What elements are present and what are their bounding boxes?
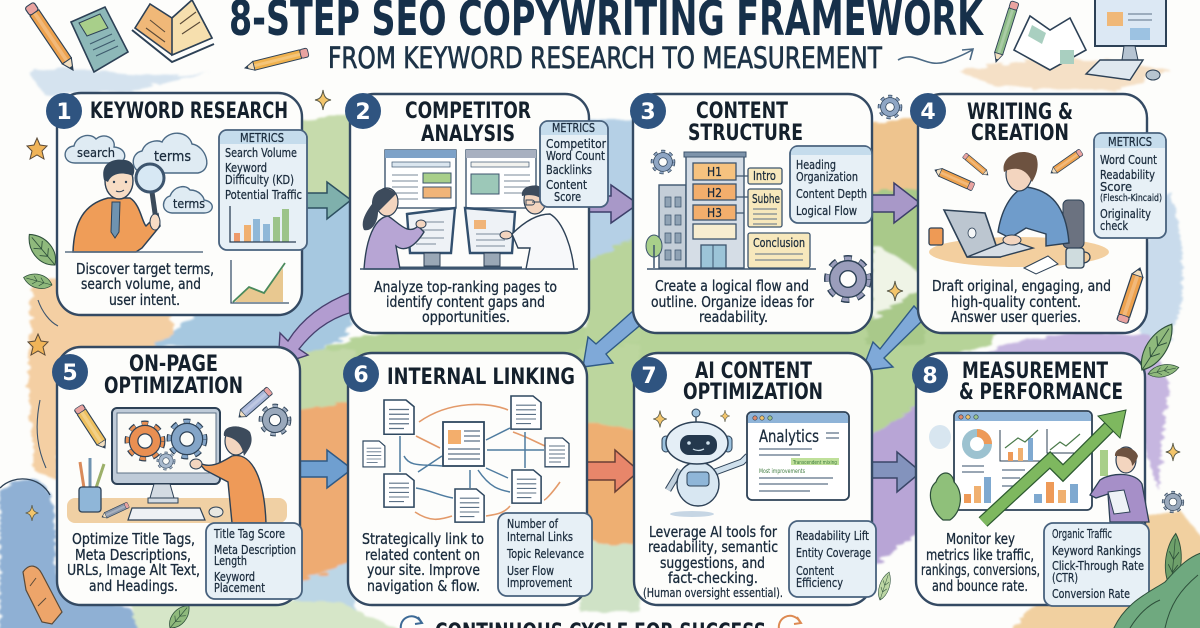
body text: suggestions, and	[660, 554, 765, 572]
heading: writing and creation: CREATION	[971, 121, 1069, 146]
body text	[362, 530, 484, 595]
illustration: browser pages and people at monitors	[360, 150, 578, 269]
arrow: step 3 to step 4	[868, 183, 920, 223]
metrics box: Backlinks	[546, 162, 592, 177]
metrics box: Word Count	[546, 148, 605, 163]
badge 3	[630, 93, 666, 129]
arrow: step 4 to step 7	[862, 306, 925, 371]
metrics box: Efficiency	[796, 575, 843, 590]
body text: readability, semantic	[648, 538, 778, 556]
illustration: building with heading levels: H2	[707, 185, 722, 200]
heading: keyword research: KEYWORD RESEARCH	[90, 99, 288, 124]
illustration: robot	[653, 409, 748, 517]
body text: Create a logical flow and	[655, 277, 809, 295]
body text: readability.	[699, 308, 768, 326]
heading: on-page optimization: OPTIMIZATION	[104, 374, 243, 399]
body text: rankings, conversions,	[921, 561, 1040, 579]
metrics box	[219, 130, 307, 250]
body text	[932, 277, 1111, 326]
metrics box: METRICS	[1108, 134, 1152, 149]
illustration: monitor with gears and person	[67, 387, 288, 523]
badge 7	[631, 357, 667, 393]
body text: Meta Descriptions,	[75, 546, 191, 564]
body text: related content on	[365, 546, 480, 564]
metrics box	[498, 513, 592, 596]
outline cards: Subhe	[752, 191, 780, 206]
header decoration: pencils and books left	[25, 0, 309, 73]
metrics box: User Flow	[507, 563, 554, 578]
body text: URLs, Image Alt Text,	[67, 561, 200, 579]
badge 1: 1	[56, 100, 72, 125]
heading: ai content optimization: AI CONTENT	[695, 359, 812, 384]
metrics box	[1044, 523, 1149, 606]
arrow: step 3 to step 6	[583, 310, 644, 367]
metrics box: Content	[546, 177, 587, 192]
arrow: step 2 to step 3	[585, 185, 638, 223]
body text: Monitor key	[946, 530, 1015, 548]
body text: Optimize Title Tags,	[72, 530, 195, 548]
metrics box: Difficulty (KD)	[225, 172, 294, 187]
arrow: step 7 to step 8	[866, 452, 921, 492]
bar chart	[230, 206, 296, 242]
heading: competitor analysis: COMPETITOR	[405, 99, 531, 124]
heading: on-page optimization: ON-PAGE	[129, 352, 218, 377]
metrics box: (Flesch-Kincaid)	[1100, 193, 1162, 204]
metrics box	[789, 521, 876, 597]
body text: outline. Organize ideas for	[651, 293, 815, 311]
panel: step 5 on-page optimization	[52, 347, 302, 605]
illustration: building with heading levels: H1	[707, 164, 722, 179]
body text: (Human oversight essential).	[643, 585, 783, 600]
body text: navigation & flow.	[367, 577, 480, 595]
metrics box	[540, 120, 608, 207]
illustration: building with heading levels	[646, 152, 816, 269]
body text: user intent.	[109, 291, 180, 309]
badge 5	[52, 354, 88, 390]
badge 4: 4	[920, 100, 936, 125]
metrics box: Content Depth	[796, 186, 867, 201]
metrics box: Competitor	[546, 136, 607, 151]
metrics box: Search Volume	[225, 145, 297, 160]
badge 6: 6	[353, 363, 369, 388]
metrics box: Title Tag Score	[213, 526, 285, 541]
analytics window	[747, 412, 849, 500]
metrics box: Readability Lift	[796, 528, 869, 543]
metrics box: Readability	[1100, 167, 1155, 182]
metrics box: Conversion Rate	[1052, 586, 1130, 601]
metrics box: Word Count	[1100, 152, 1157, 167]
metrics box: Score	[1100, 179, 1132, 194]
metrics box: Keyword	[225, 160, 267, 175]
heading: measurement and performance	[959, 359, 1123, 405]
metrics box: METRICS	[552, 120, 595, 135]
badge 8	[912, 357, 948, 393]
body text	[67, 530, 200, 595]
body text	[921, 530, 1040, 595]
metrics box: Organic Traffic	[1052, 526, 1112, 541]
body text: Discover target terms,	[76, 260, 214, 278]
metrics box: Meta Description	[214, 542, 296, 557]
illustration: dashboard with growth arrow and analyst	[929, 410, 1149, 522]
heading: ai content optimization	[683, 359, 823, 405]
heading: writing and creation: WRITING &	[967, 100, 1073, 125]
icon: small gear	[653, 152, 673, 172]
panel: step 4 writing and creation	[910, 93, 1166, 333]
body text: Answer user queries.	[951, 308, 1081, 326]
metrics box: Keyword Rankings	[1052, 543, 1141, 558]
metrics box: (CTR)	[1052, 570, 1078, 585]
link diagram	[363, 396, 569, 522]
panel: step 2 competitor analysis	[345, 93, 608, 333]
metrics box: Logical Flow	[796, 203, 857, 218]
illustration: clouds and person with magnifier: terms	[154, 149, 191, 165]
metrics box: Improvement	[507, 575, 572, 590]
metrics box: Number of	[507, 516, 558, 531]
metrics box	[790, 146, 872, 223]
icon: blue cycle arrow	[401, 616, 422, 628]
heading: ai content optimization: OPTIMIZATION	[683, 380, 823, 405]
heading: writing and creation	[967, 100, 1073, 146]
outline cards: Conclusion	[753, 235, 805, 250]
arrow: step 2 to step 5	[278, 292, 352, 365]
decorative stars, leaves, blue blob on left	[0, 90, 903, 628]
body text	[374, 278, 557, 326]
body text: metrics like traffic,	[926, 546, 1034, 564]
metrics box: check	[1100, 218, 1129, 233]
metrics box: Score	[554, 189, 581, 204]
analytics window: Analytics	[759, 427, 819, 447]
arrow: step 1 to step 2	[306, 182, 351, 219]
metrics box: Click-Through Rate	[1052, 558, 1144, 573]
panel: step 8 measurement and performance	[912, 353, 1149, 606]
header decoration: computer, book, pencil right	[898, 0, 1166, 80]
body text	[76, 260, 214, 309]
arrow: step 5 to step 6	[295, 450, 352, 488]
body text	[643, 523, 783, 600]
icon: large gear	[829, 260, 867, 298]
body text: identify content gaps and	[386, 293, 545, 311]
badge 3: 3	[640, 100, 656, 125]
body text: Strategically link to	[362, 530, 484, 548]
metrics box: Internal Links	[507, 529, 573, 544]
metrics box	[206, 523, 302, 599]
metrics box: Placement	[214, 580, 265, 595]
metrics box: Topic Relevance	[506, 546, 584, 561]
heading: internal linking: INTERNAL LINKING	[387, 365, 575, 390]
panel: step 6 internal linking	[343, 353, 592, 605]
body text: search volume, and	[81, 275, 201, 293]
arrow: step 6 to step 7	[582, 450, 639, 492]
footer: continuous cycle for success	[401, 616, 801, 628]
body text: Leverage AI tools for	[649, 523, 778, 541]
body text: and Headings.	[89, 577, 178, 595]
badge 1	[46, 93, 82, 129]
heading: competitor analysis: ANALYSIS	[421, 122, 515, 147]
metrics box: Originality	[1100, 206, 1151, 221]
subtitle: FROM KEYWORD RESEARCH TO MEASUREMENT	[328, 41, 882, 75]
icon: gear between panels 3 and 4	[880, 97, 900, 117]
outline cards	[748, 168, 810, 268]
mini growth chart	[231, 260, 289, 303]
body text: Analyze top-ranking pages to	[374, 278, 557, 296]
heading: competitor analysis	[405, 99, 531, 147]
badge 6	[343, 356, 379, 392]
body text: your site. Improve	[367, 561, 480, 579]
badge 5: 5	[62, 361, 78, 386]
icon: large pencil	[1117, 266, 1145, 324]
outline cards: Intro	[753, 168, 776, 183]
metrics box: Potential Traffic	[225, 187, 302, 202]
badge 7: 7	[641, 364, 657, 389]
metrics box: Content	[796, 563, 834, 578]
icon: orange cycle arrow	[779, 616, 801, 628]
body text: fact-checking.	[668, 569, 758, 587]
badge 2: 2	[355, 100, 371, 125]
metrics box: Heading	[796, 157, 836, 172]
badge 8: 8	[922, 364, 938, 389]
analytics window: Most improvements	[759, 468, 805, 475]
illustration: clouds and person with magnifier: search	[77, 145, 115, 160]
metrics box: Keyword	[214, 569, 255, 584]
body text: Draft original, engaging, and	[932, 277, 1111, 295]
panel: step 7 ai content optimization	[631, 353, 876, 605]
heading: measurement and performance: & PERFORMANCE	[959, 380, 1123, 405]
heading: content structure: CONTENT	[696, 99, 788, 124]
metrics box: METRICS	[240, 130, 284, 145]
heading: content structure: STRUCTURE	[688, 121, 803, 146]
heading: measurement and performance: MEASUREMENT	[962, 359, 1108, 384]
decorative leaves on right	[875, 319, 1200, 628]
badge 2	[345, 93, 381, 129]
metrics box: Length	[214, 553, 247, 568]
body text: high-quality content.	[951, 293, 1081, 311]
illustration: clouds and person with magnifier	[65, 133, 212, 252]
illustration: building with heading levels: H3	[707, 205, 722, 220]
illustration: writer at laptop	[929, 149, 1109, 274]
heading: on-page optimization	[104, 352, 243, 399]
analytics window: Transcendent mixing	[792, 460, 837, 466]
metrics box: Organization	[796, 169, 858, 184]
metrics box: Entity Coverage	[796, 545, 871, 560]
body text	[651, 277, 815, 326]
heading: content structure	[688, 99, 803, 146]
panel: step 3 content structure	[630, 93, 872, 333]
body text: and bounce rate.	[932, 577, 1028, 595]
badge 4	[910, 93, 946, 129]
metrics box	[1094, 133, 1166, 238]
illustration: clouds and person with magnifier: terms	[173, 196, 205, 211]
panel: step 1 keyword research	[46, 93, 307, 315]
body text: opportunities.	[422, 308, 510, 326]
